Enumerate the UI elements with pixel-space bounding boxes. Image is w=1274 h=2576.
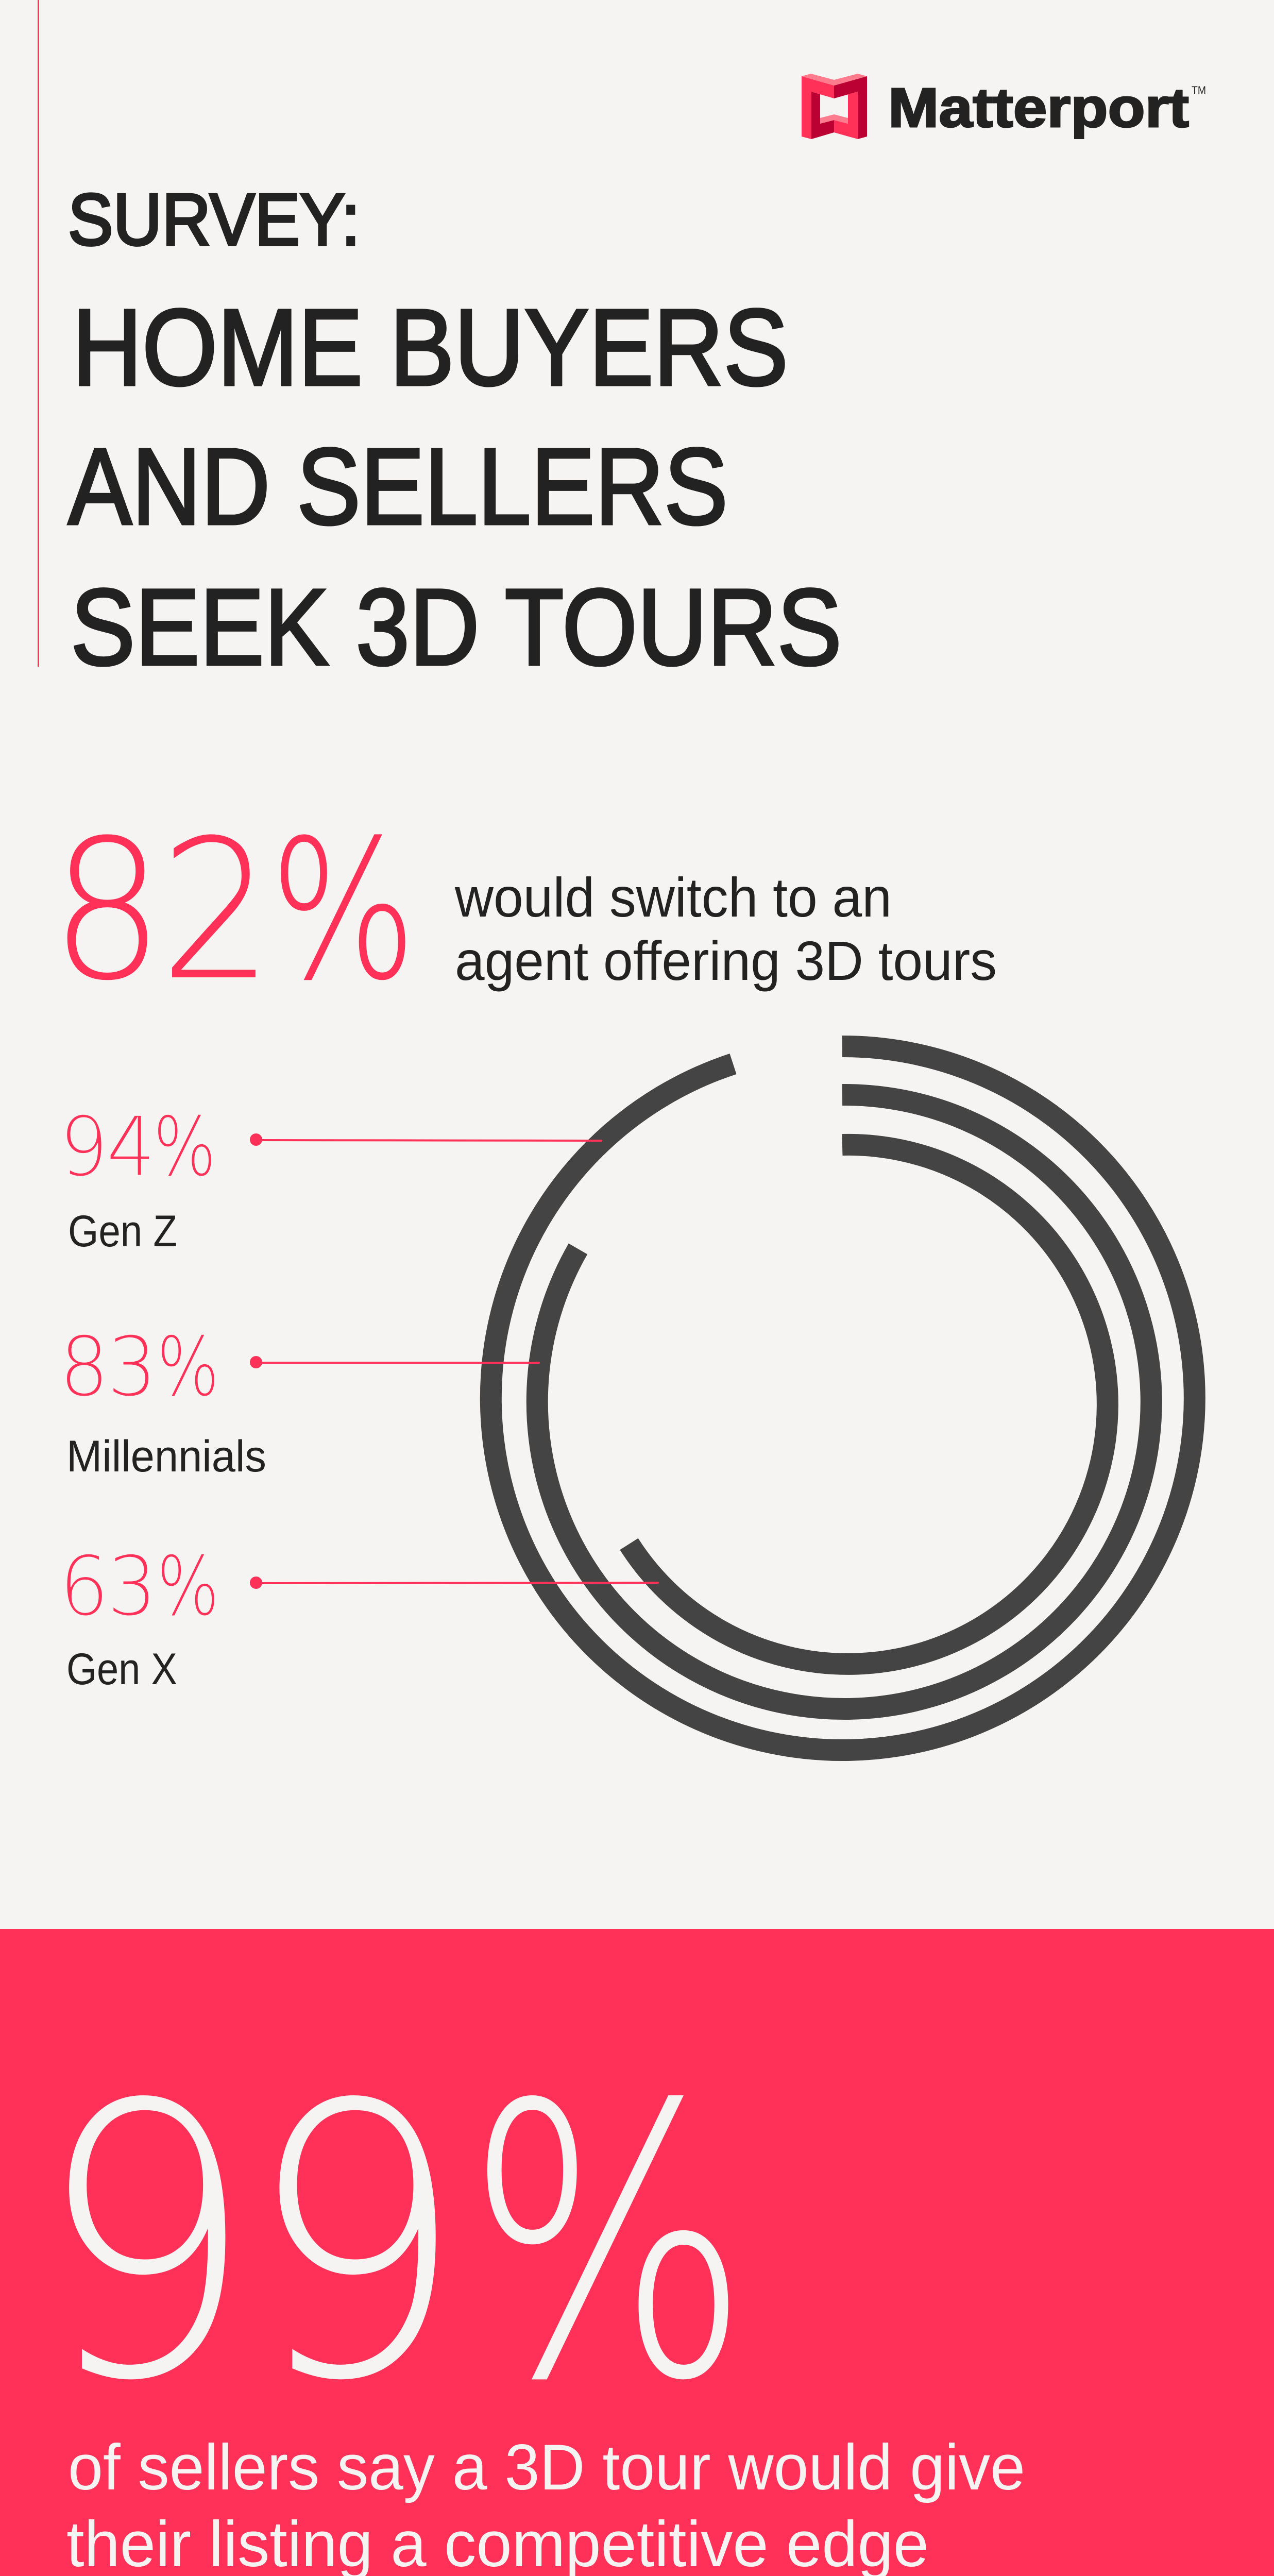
number 63% <box>59 1539 219 1634</box>
number 94%: 94 <box>59 1100 154 1195</box>
big number 82%: % <box>269 799 417 1023</box>
logo: Matterport <box>802 74 1206 139</box>
number 83%: 83 <box>59 1319 155 1415</box>
accent line beside title <box>38 0 39 667</box>
panel: header and ring chart background <box>0 0 1274 1929</box>
leader line <box>250 1133 601 1146</box>
description: would switch to an <box>454 866 892 928</box>
description: of sellers say a 3D tour would give <box>68 2432 1025 2503</box>
title line: survey: SURVEY: <box>68 179 360 261</box>
number 94%: % <box>153 1099 216 1195</box>
big number 99%: 99 <box>36 2026 456 2463</box>
leader line <box>250 1577 658 1589</box>
big number 99%: % <box>465 2025 751 2463</box>
number 83% <box>59 1319 219 1415</box>
callout: Gen Z <box>59 1099 601 1256</box>
number 83%: % <box>157 1319 219 1415</box>
leader line <box>250 1356 539 1368</box>
title line 3: SEEK 3D TOURS <box>71 566 842 688</box>
ring: Gen X 63% <box>629 1145 1108 1664</box>
number 63%: 63 <box>59 1539 155 1634</box>
title line 2: AND SELLERS <box>68 426 728 547</box>
wordmark: Matterport <box>888 76 1189 139</box>
trademark: TM <box>1192 84 1206 96</box>
label: Gen Z <box>68 1207 177 1256</box>
red background <box>0 1929 1274 2576</box>
description <box>454 866 997 992</box>
callout: Gen X <box>59 1539 658 1694</box>
chart: generation rings <box>491 1046 1195 1750</box>
label: Millennials <box>66 1432 266 1481</box>
number 63%: % <box>157 1539 219 1634</box>
description: agent offering 3D tours <box>455 929 997 992</box>
big number 82% <box>50 799 417 1023</box>
callout: Millennials <box>59 1319 539 1481</box>
number 94% <box>59 1099 216 1195</box>
stat: 82 percent <box>50 799 997 1023</box>
big number 82%: 82 <box>50 799 269 1023</box>
title <box>68 179 842 688</box>
icon: Matterport mark <box>802 74 867 139</box>
ring: Gen Z 94% <box>491 1046 1195 1750</box>
title line 1: HOME BUYERS <box>72 286 788 408</box>
label: Gen X <box>66 1645 177 1694</box>
big number 99% <box>36 2025 751 2463</box>
ring: Millennials 83% <box>537 1095 1151 1709</box>
description <box>66 2432 1025 2576</box>
panel: sellers <box>0 1929 1274 2576</box>
